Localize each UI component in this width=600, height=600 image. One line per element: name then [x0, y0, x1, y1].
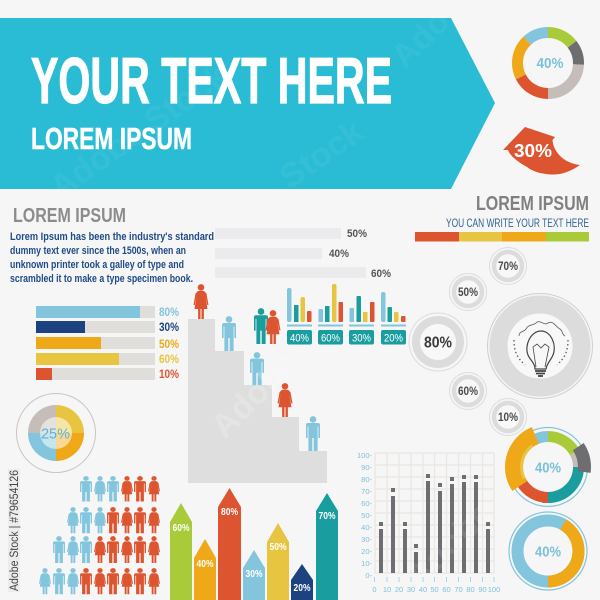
slider bars: 40%: [329, 248, 349, 260]
faint stock watermark: Adobe: [399, 494, 500, 596]
horizontal progress bars: [36, 306, 179, 381]
faint stock watermark: Stock: [273, 112, 371, 197]
arrow column 50%: [267, 523, 289, 600]
horizontal progress bars: 30%: [159, 322, 179, 334]
row 1: [80, 476, 160, 502]
heading right: [446, 193, 589, 230]
arrow column 20%: [291, 564, 313, 600]
horizontal progress bars: 60%: [159, 354, 179, 366]
slider bars: 50%: [347, 228, 367, 240]
banner title: YOUR TEXT HERE: [31, 44, 392, 117]
y axis labels: 70-: [361, 487, 372, 496]
percentage circle 50%: 50%: [458, 287, 478, 299]
x axis ticks and labels: [372, 577, 500, 594]
arrow column 40%: [194, 539, 216, 600]
percentage circle 10%: 10%: [498, 412, 518, 424]
banner subtitle: LOREM IPSUM: [31, 121, 192, 156]
faint stock watermark: Adobe: [204, 344, 305, 446]
y axis labels: 50-: [361, 511, 372, 520]
arrow column 60%: 60%: [172, 523, 190, 534]
big circle with lightbulb: [488, 294, 592, 398]
mini bar chart 60%: 60%: [321, 332, 340, 344]
x axis ticks and labels: 90: [478, 585, 487, 594]
donut chart 40%: [509, 512, 587, 590]
body paragraph: [10, 231, 214, 285]
mini bar chart 30%: [349, 296, 374, 344]
columns: [379, 474, 490, 573]
red curved arrow 30%: 30%: [514, 141, 552, 161]
y axis labels: 40-: [361, 523, 372, 532]
people pyramid: [39, 476, 160, 594]
stairs with people: [188, 284, 327, 483]
x axis ticks and labels: 60: [442, 585, 451, 594]
x axis ticks and labels: 10: [383, 585, 391, 594]
arrow column 80%: 80%: [221, 507, 238, 518]
row 4: [39, 568, 160, 594]
column chart with grid: [357, 451, 500, 594]
body paragraph: scrambled it to make a type specimen book.: [10, 273, 193, 285]
horizontal progress bars: 80%: [159, 307, 179, 319]
y axis labels: [357, 451, 372, 580]
arrow column 30%: [243, 550, 265, 600]
exploded donut chart 40%: 40%: [535, 460, 561, 476]
top donut chart 40%: [518, 32, 578, 94]
x axis ticks and labels: 70: [454, 585, 463, 594]
couple icon: [254, 308, 280, 344]
row 3: [53, 536, 160, 563]
faint stock watermark: Adobe Stock: [43, 56, 235, 207]
percentage circle 10%: [490, 398, 526, 436]
top donut chart 40%: 40%: [536, 55, 564, 72]
y axis labels: 20-: [361, 547, 372, 556]
heading left: LOREM IPSUM: [13, 205, 126, 227]
pie chart 25%: 25%: [41, 426, 70, 442]
mini bar chart 60%: [318, 284, 343, 344]
pie chart 25%: [16, 394, 96, 472]
percentage circle 70%: 70%: [498, 261, 518, 273]
mini bar chart 30%: 30%: [352, 332, 371, 344]
mini bar chart 20%: 20%: [384, 332, 403, 344]
horizontal progress bars: 10%: [159, 369, 179, 381]
body paragraph: unknown printer took a galley of type and: [10, 259, 184, 271]
arrow column 60%: [170, 503, 192, 600]
x axis ticks and labels: 80: [466, 585, 475, 594]
horizontal progress bars: 50%: [159, 339, 179, 351]
percentage circle 60%: 60%: [458, 386, 478, 398]
x axis ticks and labels: 30: [407, 585, 415, 594]
x axis ticks and labels: 100: [488, 585, 500, 594]
exploded donut chart 40%: [508, 428, 588, 506]
arrow column 80%: [218, 488, 241, 600]
y axis labels: 60-: [361, 499, 372, 508]
mini bar chart 20%: [381, 292, 406, 344]
y axis labels: 90-: [361, 463, 372, 472]
arrow column 70%: [316, 493, 338, 600]
x axis ticks and labels: 20: [395, 585, 403, 594]
row 2: [67, 507, 160, 533]
percentage circle 80%: 80%: [424, 334, 452, 352]
arrow column 30%: 30%: [246, 569, 263, 580]
donut chart 40%: 40%: [535, 544, 561, 560]
red curved arrow 30%: [503, 127, 580, 175]
slider bars: [215, 228, 391, 280]
percentage circle 60%: [450, 372, 486, 410]
vertical stock credit: Adobe Stock | #79654126: [9, 470, 21, 591]
body paragraph: Lorem Ipsum has been the industry's standard: [10, 231, 214, 243]
percentage circle 50%: [450, 274, 486, 310]
percentage circle 70%: [490, 248, 526, 284]
y axis labels: 80-: [361, 475, 372, 484]
heading left: [10, 205, 214, 285]
slider bars: 60%: [371, 268, 391, 280]
banner arrow: [0, 18, 495, 189]
y axis labels: 10-: [361, 559, 372, 568]
arrow column 70%: 70%: [318, 511, 336, 522]
x axis ticks and labels: 50: [430, 585, 439, 594]
percentage circle 80%: [409, 313, 467, 371]
body paragraph: dummy text ever since the 1500s, when an: [10, 245, 186, 257]
arrow column 40%: 40%: [196, 559, 214, 570]
y axis labels: 0-: [365, 571, 372, 580]
arrow column 20%: 20%: [294, 583, 311, 594]
arrow column 50%: 50%: [270, 542, 287, 553]
icon: lightbulb: [514, 322, 568, 376]
x axis ticks and labels: 0: [372, 585, 377, 594]
y axis labels: 30-: [361, 535, 372, 544]
faint stock watermark: [43, 0, 500, 596]
y axis labels: 100-: [357, 451, 372, 460]
colour strip: [415, 232, 589, 242]
x axis ticks and labels: 40: [419, 585, 427, 594]
mini bar chart 40%: 40%: [290, 332, 309, 344]
mini bar chart 40%: [287, 288, 312, 344]
